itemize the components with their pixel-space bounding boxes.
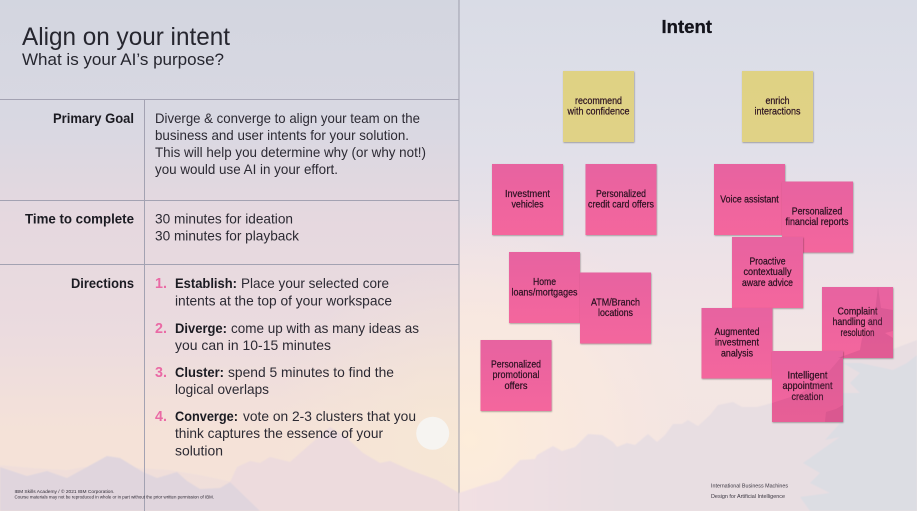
- step 2: come up with as many ideas as: [231, 321, 419, 336]
- sticky: personalized promotional offers: [480, 340, 552, 411]
- step 2: 2.: [155, 321, 167, 337]
- text block: time to complete: 30 minutes for ideation: [155, 212, 293, 226]
- sticky: proactive contextually aware advice: [732, 237, 803, 308]
- text block: time to complete: [155, 212, 299, 244]
- sticky: augmented investment analysis: analysis: [721, 348, 753, 360]
- step 4: [155, 409, 416, 458]
- panel: right intent board: [459, 17, 917, 511]
- illustration: right mountains and tree: [459, 340, 917, 511]
- sticky: home loans/mortgages: loans/mortgages: [512, 288, 578, 299]
- sticky: complaint handling and resolution: resolution: [840, 328, 874, 339]
- sticky: ATM/Branch locations: ATM/Branch: [591, 298, 640, 308]
- sticky: enrich interactions: interactions: [754, 107, 800, 118]
- step 2: you can in 10-15 minutes: [175, 338, 331, 353]
- heading: Intent: Intent: [662, 17, 712, 37]
- sticky: complaint handling and resolution: [822, 287, 893, 358]
- panel: left information panel: [0, 0, 459, 511]
- step 1: Place your selected core: [241, 276, 389, 291]
- text block: time to complete: 30 minutes for playback: [155, 228, 299, 244]
- sticky: personalized credit card offers: Personalized: [596, 189, 646, 200]
- step 3: logical overlaps: [175, 382, 269, 397]
- step 1: Establish:: [175, 276, 237, 291]
- sticky: investment vehicles: Investment: [505, 189, 550, 200]
- text block: primary goal description: This will help you determine why (or why not!): [155, 145, 426, 160]
- text block: primary goal description: Diverge & converge to align your team on the: [155, 111, 420, 126]
- text block: primary goal description: business and user intents for your solution.: [155, 128, 409, 143]
- sticky: augmented investment analysis: Augmented: [714, 327, 760, 338]
- illustration: tree and mountain tinting over the notes: [772, 287, 893, 422]
- sticky: ATM/Branch locations: locations: [598, 308, 633, 319]
- step 3: [155, 365, 394, 397]
- step 3: 3.: [155, 365, 167, 381]
- sticky: personalized promotional offers: Personalized: [491, 360, 541, 370]
- footer: organisation: [711, 484, 788, 500]
- sticky: voice assistant: Voice assistant: [720, 194, 779, 206]
- step 2: [155, 321, 419, 353]
- footer: organisation: Design for Artificial Intelligence: [711, 494, 785, 500]
- step 4: think captures the essence of your: [175, 426, 383, 441]
- sticky: personalized credit card offers: [586, 164, 656, 235]
- sticky: intelligent appointment creation: [772, 351, 843, 422]
- footer: copyright: [14, 488, 214, 500]
- label: time to complete: Time to complete: [25, 212, 134, 226]
- step 1: intents at the top of your workspace: [175, 294, 392, 308]
- sticky: personalized promotional offers: offers: [504, 381, 528, 392]
- sticky: ATM/Branch locations: [580, 272, 651, 344]
- sticky: recommend with confidence: with confidence: [567, 107, 630, 118]
- icon: sun: [416, 417, 449, 450]
- sticky: personalized promotional offers: promotional: [492, 370, 540, 381]
- step 2: Diverge:: [175, 321, 227, 336]
- table rules: [0, 0, 459, 511]
- background: warm glow: [459, 210, 759, 511]
- illustration: left mountains: [0, 427, 459, 511]
- sticky: personalized financial reports: financial reports: [786, 217, 848, 228]
- sticky: home loans/mortgages: Home: [533, 277, 556, 288]
- sticky: proactive contextually aware advice: contextually: [744, 267, 792, 278]
- sticky: augmented investment analysis: [702, 308, 772, 378]
- step 4: vote on 2-3 clusters that you: [243, 409, 416, 424]
- sticky: home loans/mortgages: [509, 252, 580, 323]
- step 4: Converge:: [175, 409, 238, 424]
- footer: organisation: International Business Machines: [711, 484, 788, 490]
- footer: copyright: IBM Skills Academy / © 2021 IBM Corporation.: [14, 488, 114, 494]
- title: Align on your intent: [22, 24, 230, 51]
- step 1: 1.: [155, 276, 167, 292]
- sticky: augmented investment analysis: investment: [715, 338, 759, 349]
- sticky: personalized financial reports: [782, 182, 853, 252]
- step 3: Cluster:: [175, 365, 224, 380]
- text block: primary goal description: you would use AI in your effort.: [155, 162, 338, 177]
- sticky: proactive contextually aware advice: Proactive: [750, 256, 786, 268]
- sticky: investment vehicles: [492, 164, 563, 235]
- sticky: intelligent appointment creation: Intelligent: [788, 370, 828, 382]
- sticky: personalized credit card offers: credit card offers: [588, 200, 654, 211]
- sticky: complaint handling and resolution: handling and: [832, 317, 883, 328]
- step 4: 4.: [155, 409, 167, 425]
- step 3: spend 5 minutes to find the: [228, 365, 394, 380]
- label: primary goal: Primary Goal: [53, 111, 134, 126]
- sticky: intelligent appointment creation: appointment: [782, 381, 833, 392]
- text block: primary goal description: [155, 111, 426, 177]
- sticky: recommend with confidence: recommend: [575, 96, 622, 107]
- step 4: solution: [175, 444, 223, 458]
- sticky: enrich interactions: enrich: [766, 96, 790, 107]
- directions list: [155, 276, 419, 458]
- sticky: intelligent appointment creation: creation: [792, 392, 824, 403]
- sticky: proactive contextually aware advice: aware advice: [742, 278, 793, 289]
- sticky: enrich interactions: [742, 71, 813, 142]
- sticky: recommend with confidence: [563, 71, 634, 142]
- step 1: [155, 276, 392, 308]
- footer: copyright: Course materials may not be reproduced in whole or in part without the prior written permission of IBM.: [14, 495, 214, 500]
- subtitle: What is your AI’s purpose?: [22, 50, 224, 69]
- sticky: complaint handling and resolution: Complaint: [838, 306, 878, 318]
- label: directions: Directions: [71, 276, 134, 291]
- sticky: voice assistant: [714, 164, 785, 235]
- sticky: investment vehicles: vehicles: [512, 200, 544, 211]
- sticky: personalized financial reports: Personalized: [792, 206, 843, 218]
